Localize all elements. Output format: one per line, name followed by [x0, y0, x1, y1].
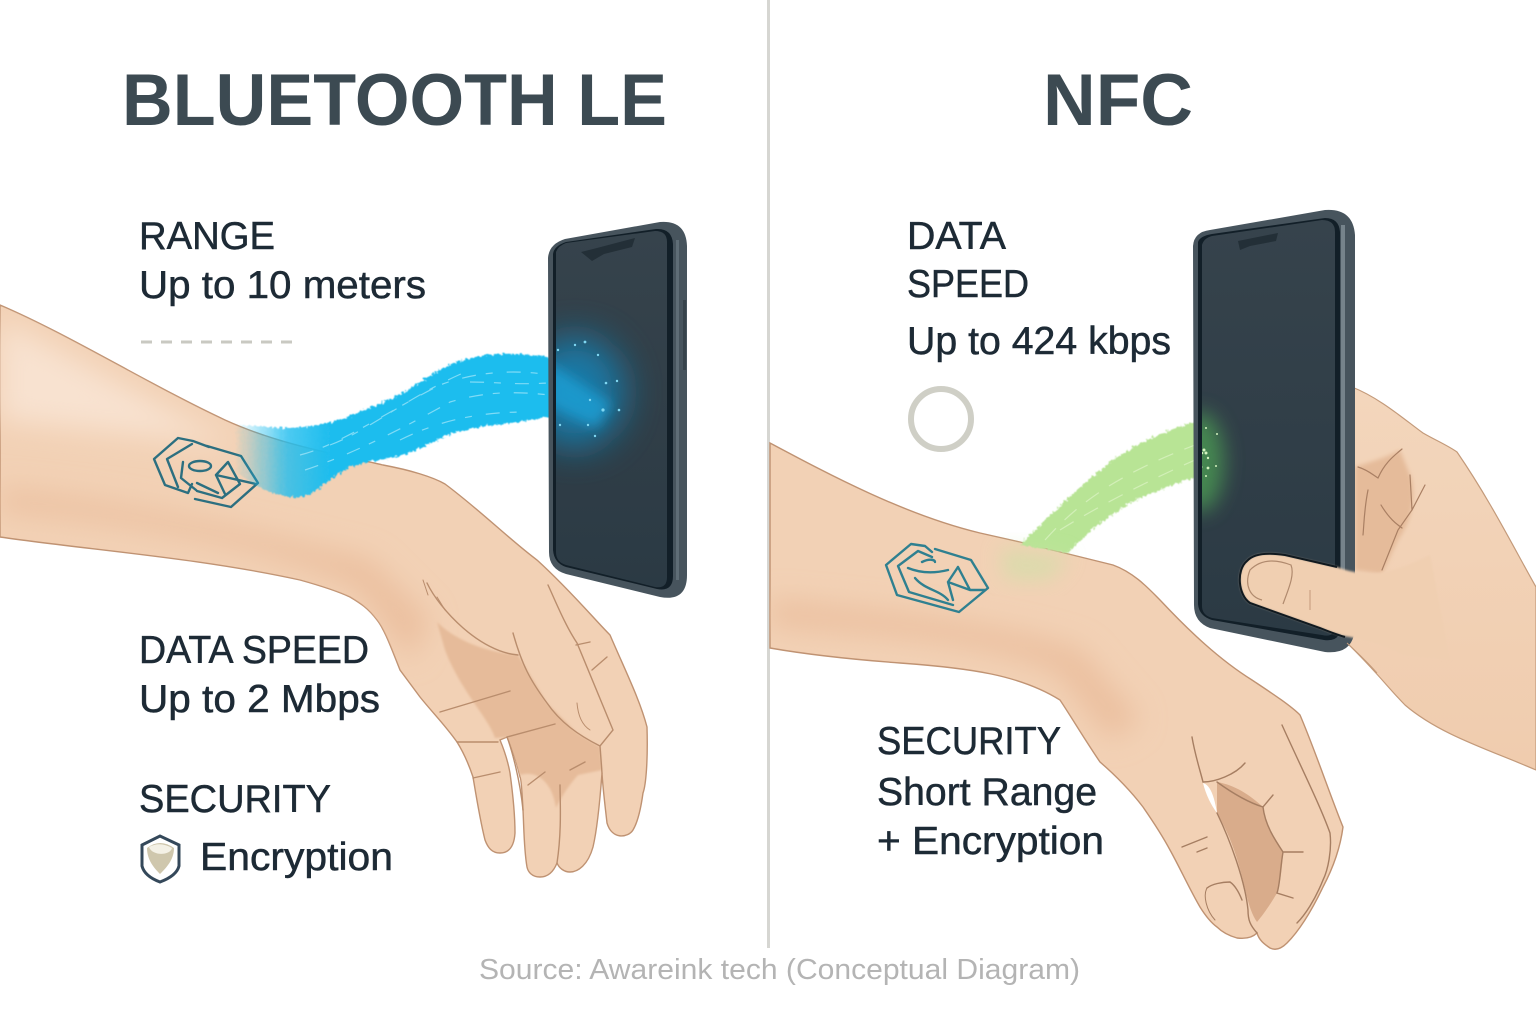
bluetooth signal wave: [225, 354, 552, 497]
dashed range line: [141, 340, 301, 344]
left arm and hand: [0, 305, 647, 877]
text: range: RANGE: [139, 215, 275, 258]
icon: range ring: [911, 389, 971, 449]
text: security left: SECURITY: [139, 778, 331, 821]
right arm and hand: [770, 443, 1343, 949]
text: data speed right: Up to 424 kbps: [907, 320, 1171, 363]
text: security right: SECURITY: [877, 720, 1061, 763]
text: range: Up to 10 meters: [139, 264, 426, 307]
phone right: [1176, 210, 1355, 652]
phone left: [548, 222, 687, 598]
text: data speed right: DATA: [907, 215, 1006, 258]
text: security right: + Encryption: [877, 820, 1104, 863]
text: data speed left: Up to 2 Mbps: [139, 678, 380, 721]
icon: shield: [142, 836, 179, 882]
right holding hand: [1300, 387, 1536, 770]
text: security left: [139, 778, 393, 879]
text: data speed left: [139, 629, 380, 721]
text: range: [139, 215, 426, 307]
text: data speed right: SPEED: [907, 263, 1029, 306]
text: data speed left: DATA SPEED: [139, 629, 369, 672]
center divider: [767, 0, 770, 948]
title: Bluetooth LE: BLUETOOTH LE: [122, 60, 667, 141]
tattoo left: [154, 438, 258, 507]
nfc signal wave: [1000, 422, 1196, 580]
text: security right: [877, 720, 1104, 863]
text: data speed right: [907, 215, 1171, 363]
source caption: Source: Awareink tech (Conceptual Diagram): [479, 954, 1080, 986]
title: NFC: NFC: [1043, 60, 1193, 141]
text: security right: Short Range: [877, 771, 1097, 814]
thumb: [1240, 554, 1450, 673]
text: security left: Encryption: [200, 836, 393, 879]
tattoo right: [886, 544, 988, 612]
